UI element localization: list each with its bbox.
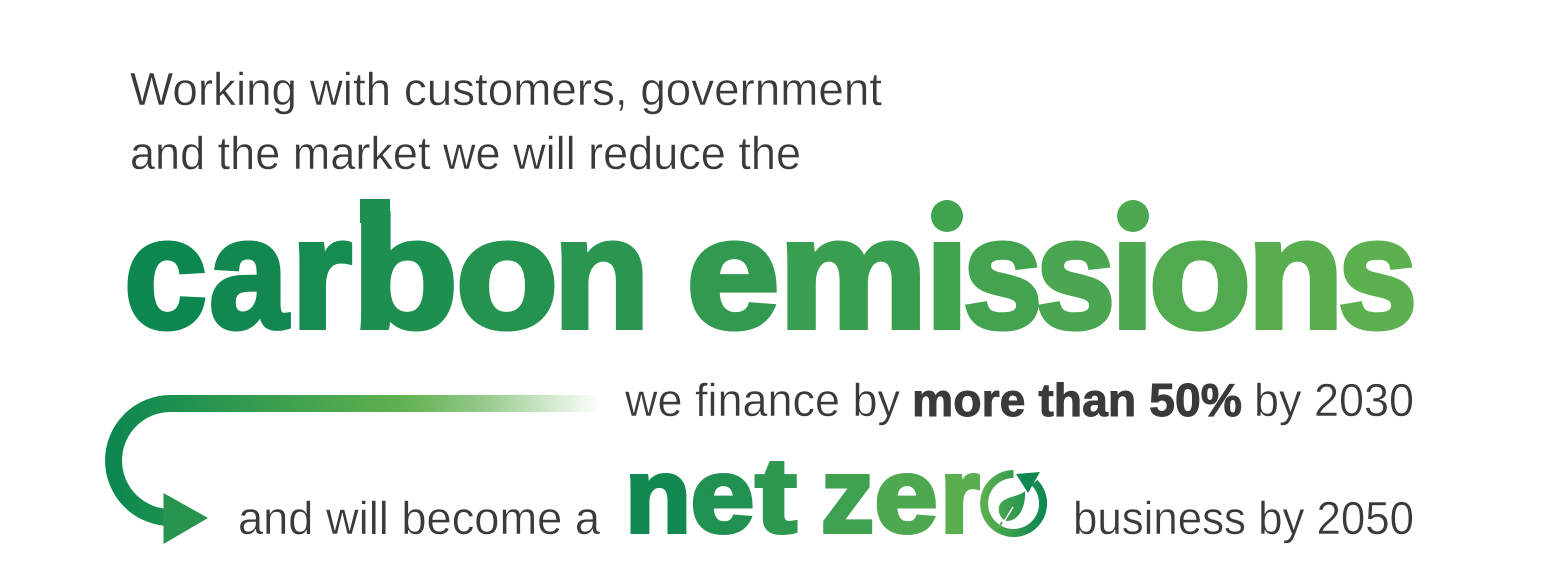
heading: carbon emissions: r (291, 186, 352, 362)
heading: carbon emissions: s (963, 185, 1042, 361)
intro text: Working with customers, government (130, 63, 882, 115)
heading: net zero: t (755, 437, 797, 555)
text: more than 50% by 2030: we finance by (624, 374, 900, 426)
heading: carbon emissions: s (1338, 185, 1417, 361)
heading: net zero: e (691, 437, 754, 555)
heading: carbon emissions: o (1149, 187, 1251, 361)
heading: net zero: n (625, 436, 691, 555)
heading: carbon emissions: n (553, 186, 650, 361)
heading: net zero (625, 436, 980, 555)
heading: carbon emissions: o (456, 187, 558, 361)
heading: carbon emissions: i (925, 186, 969, 362)
heading: net zero: e (874, 437, 938, 555)
text: business by 2050: business by 2050 (1073, 492, 1414, 544)
text: more than 50% by 2030: more than 50% (912, 374, 1242, 426)
heading: carbon emissions (124, 185, 1417, 362)
intro text (130, 63, 882, 179)
heading: carbon emissions: b (352, 186, 458, 362)
heading: carbon emissions: n (1247, 186, 1344, 361)
text: and will become a: and will become a (238, 492, 600, 544)
icon: recycling leaf (984, 472, 1043, 533)
heading: carbon emissions: e (686, 187, 780, 361)
heading: carbon emissions: i (1111, 186, 1154, 362)
text: more than 50% by 2030 (624, 374, 1414, 426)
curved arrow (114, 404, 600, 544)
heading: carbon emissions: m (778, 187, 928, 361)
heading: carbon emissions: c (124, 186, 207, 361)
intro text: and the market we will reduce the (130, 127, 801, 179)
heading: net zero: r (940, 436, 980, 555)
heading: net zero: z (821, 437, 874, 555)
heading: carbon emissions: a (209, 186, 289, 361)
text: more than 50% by 2030: by 2030 (1254, 374, 1414, 426)
heading: carbon emissions: s (1036, 185, 1115, 361)
